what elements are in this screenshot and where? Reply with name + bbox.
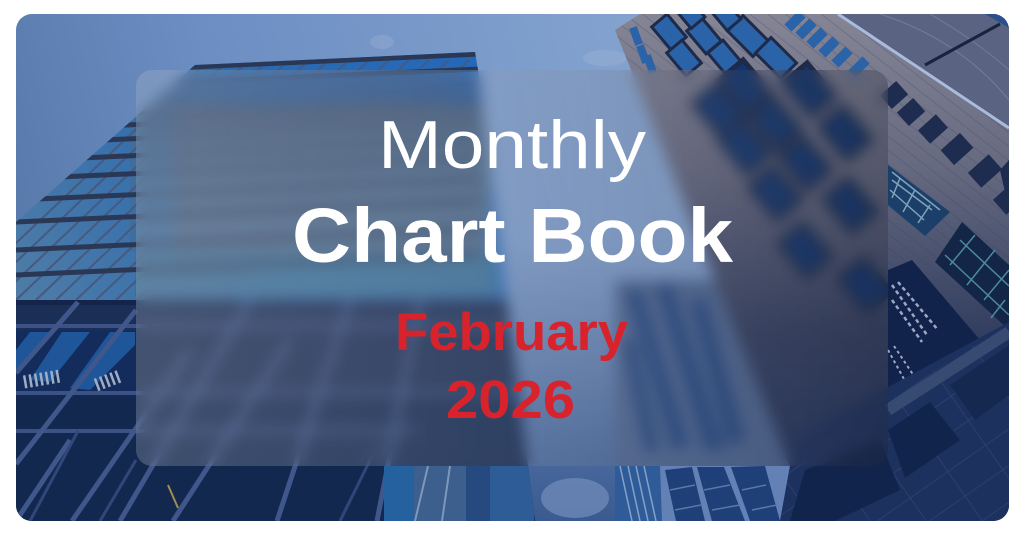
windows under panel [693, 60, 891, 312]
bottom glass [384, 466, 414, 526]
reflected area under panel [170, 104, 490, 254]
small blue windows [629, 10, 870, 78]
right lower building [615, 280, 800, 526]
heading: Chart Book: Chart Book [292, 193, 733, 279]
heading: Monthly: Monthly [378, 107, 646, 183]
left glass tower [0, 50, 546, 532]
curved roof [838, 14, 1009, 128]
date: 2026: 2026 [446, 370, 575, 430]
stained glass windows [888, 165, 1009, 330]
dark square windows [880, 81, 1024, 215]
date: February: February [395, 303, 629, 362]
window blinds [24, 376, 60, 382]
right stone tower [610, 0, 1024, 524]
lower dark floors [16, 300, 546, 330]
frosted glass panel [136, 70, 888, 466]
dark band with white marks [888, 260, 980, 390]
blue windows upper [652, 0, 797, 79]
stone plinth and tiled base [780, 160, 1009, 521]
